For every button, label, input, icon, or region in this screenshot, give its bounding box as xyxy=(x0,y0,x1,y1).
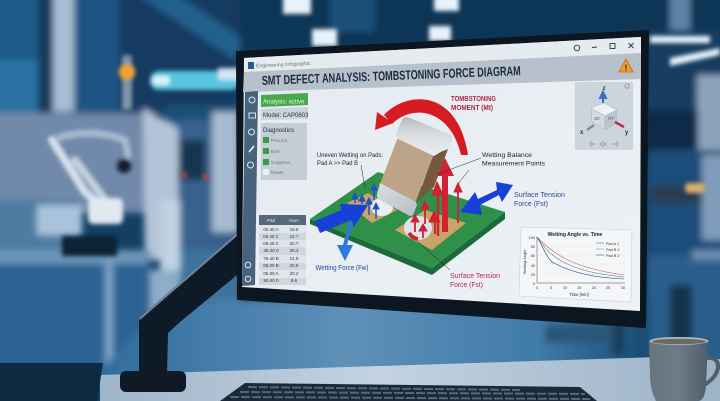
diagnostics rows: Pecunit xyxy=(271,138,288,144)
label: uneven wetting: Pad A >> Pad B xyxy=(317,160,359,167)
chip top cap xyxy=(396,117,452,156)
label: uneven wetting: Uneven Wetting on Pads: xyxy=(317,152,383,159)
axis x: x xyxy=(580,130,584,136)
data table xyxy=(259,215,306,285)
monitor screen xyxy=(242,37,641,311)
3D view cube panel: RT xyxy=(608,116,614,121)
chart x axis: 30 xyxy=(621,286,625,290)
3D view cube panel xyxy=(575,82,633,150)
capacitor chip xyxy=(377,117,452,216)
data table: 05.00 B xyxy=(263,263,279,268)
label: tombstoning moment: MOMENT (Mt) xyxy=(451,103,494,112)
chart x axis: 15 xyxy=(577,286,581,290)
dark box on desk xyxy=(0,363,103,401)
cyan machine light xyxy=(150,68,240,90)
diagnostics rows: Reset xyxy=(271,170,284,176)
signal tower light xyxy=(119,55,135,110)
model label: Model: CAP0603 xyxy=(263,113,309,119)
status badge: analysis active: Analysis: active xyxy=(263,100,305,106)
diagnostics rows xyxy=(263,137,291,176)
diagnostics rows: Bari xyxy=(271,149,280,155)
small blue wetting arrows xyxy=(352,184,379,219)
red swoosh xyxy=(409,233,418,239)
label: surface tension right xyxy=(514,190,565,208)
data table: 76.40 B xyxy=(263,256,279,261)
window title bar xyxy=(244,37,641,72)
chart y axis: 80 xyxy=(531,245,535,249)
label: surface tension right: Surface Tension xyxy=(514,190,565,199)
app logo xyxy=(248,62,254,69)
data table: 20.4 xyxy=(290,248,299,253)
chart legend: Pad A 1 xyxy=(606,242,619,246)
label: surface tension right: Force (Fst) xyxy=(514,199,548,208)
chart legend: Pad B 2 xyxy=(606,248,620,252)
label: wetting force: Wetting Force (Fw) xyxy=(316,265,368,272)
line chart: wetting angle vs time: Wetting Angle vs. Time xyxy=(548,232,603,238)
chart y axis: 0 xyxy=(533,282,535,286)
data table: 36.40 0 xyxy=(263,248,279,253)
axis z: z xyxy=(602,86,606,92)
sidebar xyxy=(242,91,258,286)
data table: 20.7 xyxy=(290,241,299,246)
label: surface tension bottom: Force (Fst) xyxy=(450,280,483,289)
status badge: analysis active xyxy=(261,93,308,107)
chart legend xyxy=(596,242,620,258)
title: SMT DEFECT ANALYSIS: TOMBSTONING FORCE DIAGRAM xyxy=(262,63,521,88)
label: wetting balance xyxy=(482,152,546,168)
chart x axis: 0 xyxy=(536,286,538,290)
blue surface tension double arrow xyxy=(460,182,513,215)
chart y axis: 100 xyxy=(529,236,535,240)
leader lines xyxy=(361,158,481,270)
chart y axis: 20 xyxy=(531,273,535,277)
icon: warning triangle xyxy=(619,59,633,73)
chart curves xyxy=(537,237,624,279)
label: surface tension bottom: Surface Tension xyxy=(450,271,500,280)
large red arrow behind chip xyxy=(436,158,454,232)
label: tombstoning moment: TOMBSTONING xyxy=(451,94,496,103)
data table: 08.40 C xyxy=(263,241,280,246)
data table: 20.2 xyxy=(290,271,299,276)
chart y axis: 60 xyxy=(531,254,535,258)
app name: Engineering Infographic xyxy=(256,61,311,69)
data table: 19.9 xyxy=(290,227,299,232)
chart legend: Pad B 2 xyxy=(606,254,620,258)
chip body xyxy=(380,137,434,203)
label: tombstoning moment xyxy=(451,94,496,112)
3D view cube panel: 3D xyxy=(594,116,601,121)
line chart: wetting angle vs time: Time [min] xyxy=(569,292,589,297)
small red tension arrows xyxy=(411,182,462,238)
data table: 9.6 xyxy=(291,278,298,283)
ceiling lights xyxy=(283,0,720,66)
label: surface tension bottom xyxy=(450,271,500,289)
data table: 22.7 xyxy=(290,234,299,239)
tombstoning moment red arc arrow xyxy=(375,99,468,155)
pad A xyxy=(347,193,397,223)
label: uneven wetting xyxy=(317,152,383,167)
chart x axis: 25 xyxy=(606,286,610,290)
keyboard xyxy=(220,383,597,401)
view controls xyxy=(591,141,617,147)
chip side face xyxy=(416,149,448,203)
big blue wetting arrow xyxy=(315,204,368,233)
pad B xyxy=(395,210,466,250)
cube xyxy=(591,103,617,130)
data table: Pad xyxy=(267,218,275,223)
coffee mug xyxy=(649,337,718,401)
chart y axis: 40 xyxy=(531,264,535,268)
label: wetting balance: Wetting Balance xyxy=(482,152,532,159)
chip bottom cap xyxy=(377,183,417,216)
title band xyxy=(243,53,641,92)
chart x axis: 5 xyxy=(550,286,552,290)
monitor bezel xyxy=(237,31,648,327)
data table: 05.00 A xyxy=(263,271,279,276)
window controls xyxy=(574,43,634,51)
gear icon xyxy=(625,84,629,88)
data table: 09.40 C xyxy=(263,234,280,239)
diagnostics panel xyxy=(261,123,307,180)
sidebar icons xyxy=(245,97,256,282)
amber background glow xyxy=(685,183,705,193)
chart x axis: 20 xyxy=(592,286,596,290)
PCB board xyxy=(310,172,505,275)
diagnostics rows: Supptton xyxy=(271,160,291,166)
line chart: wetting angle vs time xyxy=(519,227,632,302)
chart x axis xyxy=(536,286,625,290)
data table: 21.9 xyxy=(290,256,299,261)
icon: warning triangle: ! xyxy=(624,63,628,73)
data table: Num xyxy=(289,218,299,223)
data table: 00.40 A xyxy=(263,227,279,232)
robot arm xyxy=(52,133,209,256)
label: wetting balance: Measurement Points xyxy=(482,160,546,168)
chart x axis: 10 xyxy=(563,286,567,290)
axis y: y xyxy=(625,130,629,136)
data table: 80.40 0 xyxy=(263,278,279,283)
diagnostics panel: Diagnostics xyxy=(263,128,294,134)
desk surface xyxy=(100,357,720,401)
data table: 20.9 xyxy=(290,263,299,268)
blue downward force arrow xyxy=(337,222,353,261)
line chart: wetting angle vs time: Wetting Angle xyxy=(522,249,527,274)
chart y axis xyxy=(529,236,535,286)
monitor arm and base xyxy=(120,233,237,392)
model label xyxy=(261,107,309,120)
